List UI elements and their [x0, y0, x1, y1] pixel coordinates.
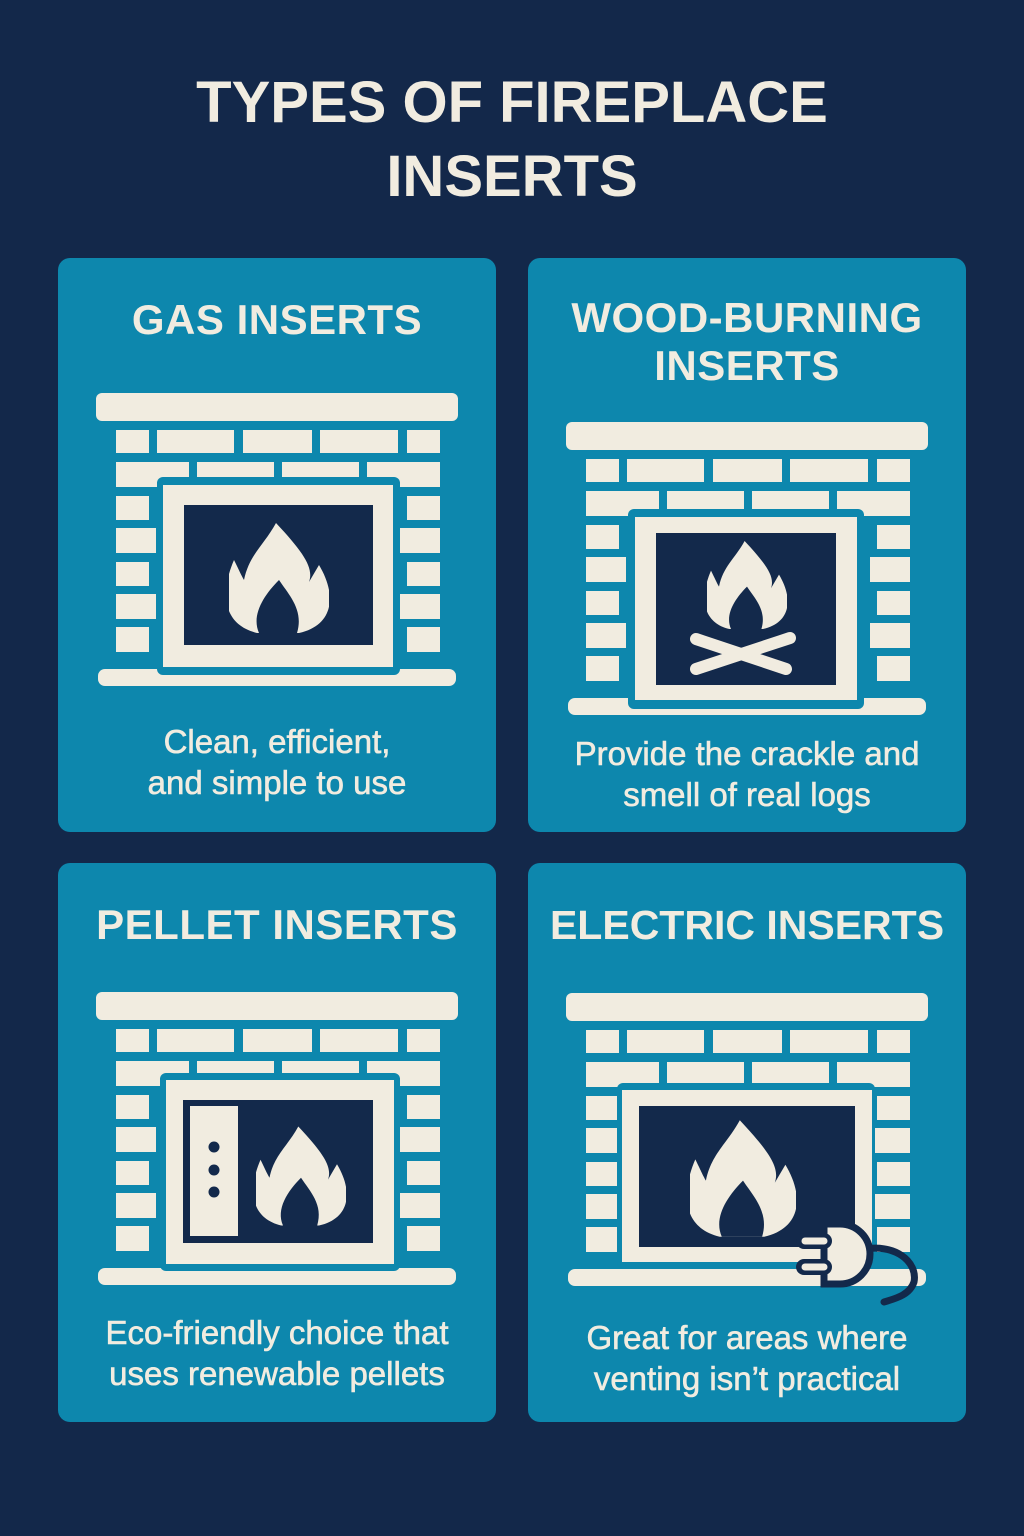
icon: electric fireplace	[566, 993, 928, 1306]
panel: wood-burning inserts	[528, 258, 966, 832]
heading: gas: GAS INSERTS	[132, 296, 422, 343]
heading: wood: INSERTS	[654, 342, 840, 389]
title: INSERTS	[386, 144, 638, 209]
heading: wood	[571, 294, 923, 389]
icon: plug	[804, 1224, 914, 1302]
panel: electric inserts	[528, 863, 966, 1422]
text: electric description: Great for areas where	[586, 1319, 907, 1356]
panel: pellet inserts	[58, 863, 496, 1422]
text: electric description	[586, 1319, 907, 1398]
text: pellet description: uses renewable pellets	[109, 1355, 445, 1392]
text: pellet description: Eco-friendly choice that	[105, 1314, 448, 1351]
title	[196, 70, 828, 209]
text: gas description: and simple to use	[148, 764, 406, 801]
heading: wood: WOOD-BURNING	[571, 294, 923, 341]
icon: pellet fireplace	[96, 992, 458, 1285]
icon: wood fireplace	[566, 422, 928, 715]
text: pellet description	[105, 1314, 449, 1392]
text: gas description	[148, 723, 406, 802]
heading: pellet: PELLET INSERTS	[96, 901, 458, 948]
heading: electric: ELECTRIC INSERTS	[550, 902, 944, 948]
text: wood description: Provide the crackle and	[575, 735, 919, 772]
text: wood description: smell of real logs	[623, 776, 871, 813]
text: electric description: venting isn’t practical	[594, 1360, 900, 1397]
title: TYPES OF FIREPLACE	[196, 70, 828, 135]
text: wood description	[575, 735, 919, 814]
text: gas description: Clean, efficient,	[164, 723, 390, 760]
icon: gas fireplace	[96, 393, 458, 686]
panel: gas inserts	[58, 258, 496, 832]
